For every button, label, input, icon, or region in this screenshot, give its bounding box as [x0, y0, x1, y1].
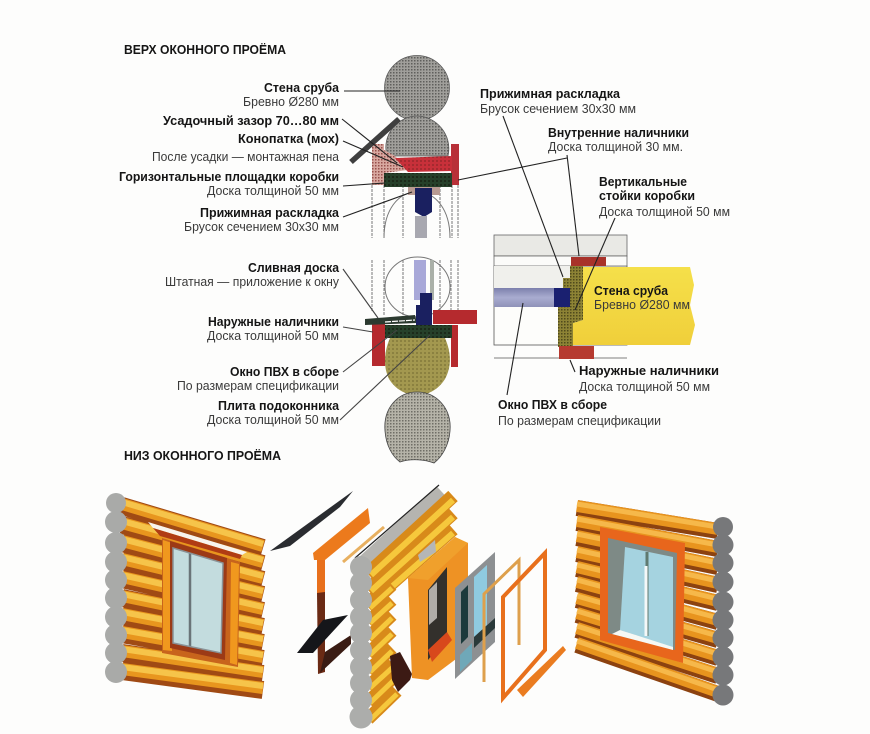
illustration: exploded parts — [270, 485, 566, 728]
glass — [620, 547, 673, 648]
gray upper log — [494, 235, 627, 256]
label: caulking — [152, 132, 339, 164]
logs — [122, 502, 263, 690]
box frame top — [408, 537, 468, 580]
label: caulking: Конопатка (мох) — [238, 132, 339, 146]
label: log wall: Стена сруба — [264, 81, 340, 95]
label: pressure strip, top — [184, 206, 340, 234]
label: pressure strip, right: Прижимная раскладка — [480, 87, 621, 101]
red side casings — [372, 144, 459, 185]
top red casing — [571, 257, 606, 266]
window sash — [455, 552, 495, 679]
label: inner casings: Внутренние наличники — [548, 126, 689, 140]
window mullion — [646, 552, 648, 636]
green horizontal platform — [384, 173, 452, 187]
heading: top of window opening: ВЕРХ ОКОННОГО ПРОЁМА — [124, 42, 286, 57]
label: outer casings, right — [579, 364, 719, 394]
label: outer casings, left: Наружные наличники — [208, 315, 339, 329]
flat casing — [503, 553, 545, 698]
opening red patch — [428, 632, 452, 662]
lower guide line — [494, 357, 627, 359]
olive vertical post — [558, 266, 583, 347]
label: vertical frame posts — [599, 175, 730, 219]
black lower plate — [297, 615, 348, 653]
label: vertical frame posts: Доска толщиной 50 мм — [599, 205, 730, 219]
label: horizontal frame platforms: Горизонтальные площадки коробки — [119, 170, 339, 184]
vertical guide lines — [372, 185, 458, 238]
drip board — [365, 315, 417, 325]
casing inner stripe — [163, 540, 239, 665]
label: PVC window, right: Окно ПВХ в сборе — [498, 398, 607, 412]
diagram: plan section — [494, 235, 695, 359]
label: horizontal frame platforms: Доска толщиной 50 мм — [207, 184, 339, 198]
glass — [173, 548, 223, 653]
label: pressure strip, right — [480, 87, 636, 116]
second blue pane — [460, 643, 472, 672]
white drip cap — [148, 522, 247, 555]
brown reveal — [170, 541, 227, 660]
frame left post — [317, 560, 325, 593]
label: pressure strip, top: Брусок сечением 30х30 мм — [184, 220, 339, 234]
label: caulking: После усадки — монтажная пена — [152, 150, 339, 164]
navy window profile — [416, 293, 432, 325]
window reveal — [608, 538, 677, 650]
label: sill plate: Плита подоконника — [218, 399, 340, 413]
blue pane — [474, 565, 487, 637]
label: pressure strip, top: Прижимная раскладка — [200, 206, 340, 220]
blue window unit — [494, 288, 554, 307]
label: outer casings, right: Доска толщиной 50 мм — [579, 380, 710, 394]
window gray frame — [173, 548, 223, 653]
label: drip board: Сливная доска — [248, 261, 340, 275]
red caulking band — [395, 156, 452, 172]
bottom red casing — [559, 346, 594, 359]
pink pressure strip — [408, 187, 440, 195]
label: log wall in plan — [594, 284, 690, 312]
label: drip board — [165, 261, 340, 289]
gray strip above window — [494, 266, 570, 288]
arc under frame — [384, 192, 450, 238]
illustration: finished wall, right — [577, 504, 734, 706]
window casing — [162, 538, 240, 667]
logs — [577, 504, 718, 694]
navy window profile — [415, 188, 432, 217]
red top board — [153, 528, 242, 559]
label: log wall — [243, 81, 340, 109]
sill — [517, 646, 566, 697]
white slit — [385, 320, 415, 322]
thin strip — [343, 527, 384, 562]
label: log wall: Бревно Ø280 мм — [243, 95, 339, 109]
label: log wall in plan: Стена сруба — [594, 284, 669, 298]
gray log ends — [350, 556, 372, 728]
leader lines — [340, 91, 615, 420]
label: outer casings, right: Наружные наличники — [579, 364, 719, 378]
window casing — [600, 527, 685, 663]
label: inner casings: Доска толщиной 30 мм. — [548, 140, 683, 154]
lower dark strip — [474, 618, 495, 648]
label: shrinkage gap: Усадочный зазор 70…80 мм — [163, 114, 339, 128]
navy profile — [554, 288, 570, 307]
label: PVC window, left — [177, 365, 339, 393]
label: pressure strip, right: Брусок сечением 30х30 мм — [480, 102, 636, 116]
window mullion — [189, 553, 191, 646]
olive log — [385, 338, 450, 395]
frame post dark part — [317, 592, 325, 674]
white lower bar — [644, 566, 648, 636]
dark slanted board — [351, 119, 399, 162]
label: log wall in plan: Бревно Ø280 мм — [594, 298, 690, 312]
black top plate — [270, 491, 353, 551]
diagram: top section — [351, 56, 459, 238]
frame bottom diagonal — [320, 635, 351, 673]
diagram: bottom section — [365, 257, 477, 463]
label: PVC window, right: По размерам спецификации — [498, 414, 661, 428]
caulking wedge — [384, 150, 408, 173]
upper arc — [385, 257, 450, 317]
label: vertical frame posts: Вертикальные — [599, 175, 687, 189]
label: sill plate: Доска толщиной 50 мм — [207, 413, 339, 427]
dark pane — [461, 585, 468, 644]
label: PVC window, right — [498, 398, 661, 428]
gray top of wall edge line — [355, 485, 439, 558]
center wall logs — [362, 491, 453, 720]
red casings — [372, 310, 477, 367]
vertical guide lines — [372, 260, 458, 315]
gray log ends — [712, 517, 734, 706]
label: outer casings, left — [207, 315, 339, 343]
gray glass unit — [415, 216, 427, 238]
thin trim strip — [484, 560, 519, 682]
upper log — [384, 56, 450, 120]
lower log — [385, 392, 450, 463]
gray glazing bead — [430, 260, 434, 300]
white sill — [612, 630, 673, 650]
box frame — [408, 537, 468, 680]
opening gray patch — [429, 582, 437, 625]
label: inner casings — [548, 126, 689, 154]
blue window unit — [414, 260, 426, 300]
gray band — [494, 256, 627, 266]
label: horizontal frame platforms — [119, 170, 339, 198]
label: outer casings, left: Доска толщиной 50 мм — [207, 329, 339, 343]
label: vertical frame posts: стойки коробки — [599, 189, 695, 203]
yellow log — [572, 267, 695, 345]
second log — [386, 116, 449, 156]
label: drip board: Штатная — приложение к окну — [165, 275, 340, 289]
gray log ends — [105, 493, 127, 683]
wall outline — [494, 266, 627, 345]
dark log cut — [390, 652, 412, 692]
illustration: finished wall, left — [105, 493, 263, 690]
green sill plate — [385, 325, 452, 338]
heading: bottom of window opening: НИЗ ОКОННОГО ПРОЁМА — [124, 448, 281, 463]
gray wedge — [418, 540, 436, 562]
frame top piece — [313, 508, 370, 560]
box frame opening — [428, 567, 447, 660]
label: PVC window, left: По размерам спецификации — [177, 379, 339, 393]
label: sill plate — [207, 399, 340, 427]
label: PVC window, left: Окно ПВХ в сборе — [230, 365, 339, 379]
